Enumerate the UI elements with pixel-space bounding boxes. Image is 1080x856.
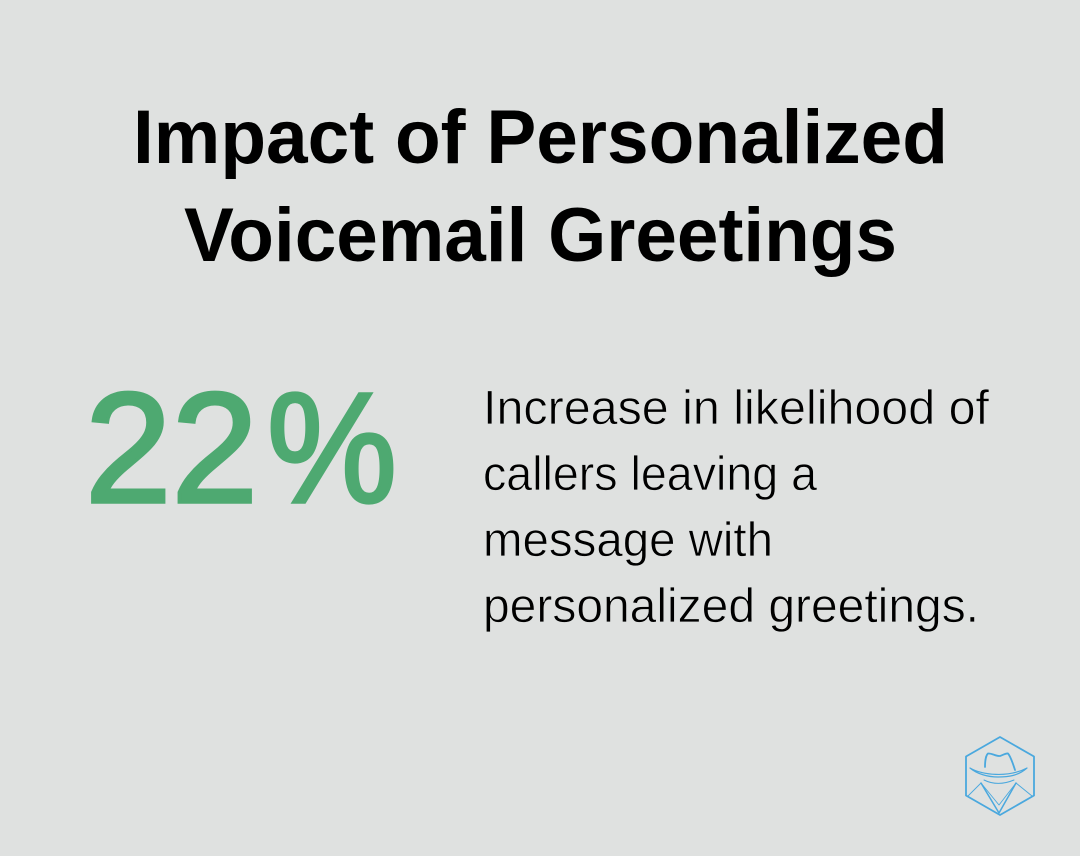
description text: callers leaving a <box>483 448 817 501</box>
title: Voicemail Greetings <box>184 193 897 278</box>
statistic: 22%: % <box>267 361 397 536</box>
title <box>133 95 948 278</box>
statistic: 22% <box>85 361 397 536</box>
description text: personalized greetings. <box>483 580 979 633</box>
icon: spy logo in hexagon <box>966 737 1034 815</box>
statistic: 22%: 22 <box>85 361 258 536</box>
title: Impact of Personalized <box>133 95 948 180</box>
description text <box>483 382 990 633</box>
description text: message with <box>483 514 773 567</box>
description text: Increase in likelihood of <box>483 382 990 435</box>
